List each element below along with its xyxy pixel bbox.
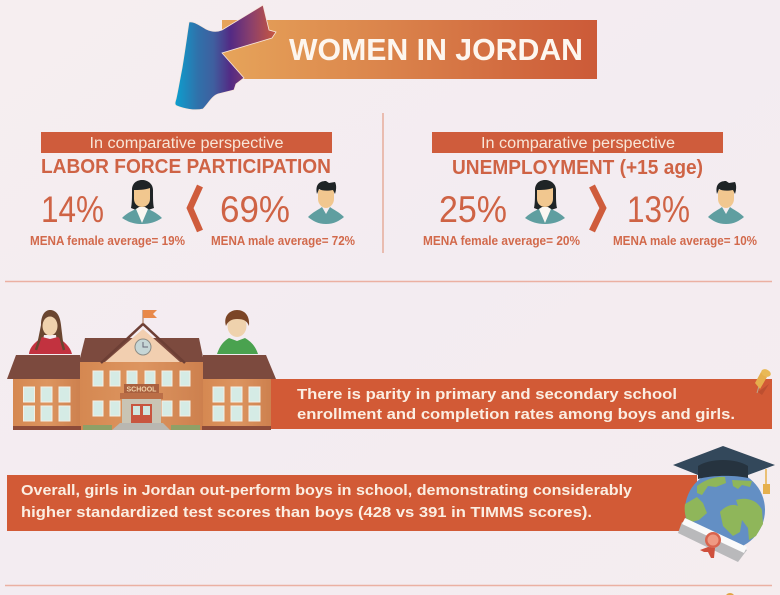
subheading bar xyxy=(432,132,723,153)
icon: woman xyxy=(525,180,565,224)
icon: map of Jordan xyxy=(175,5,276,110)
callout text: There is parity in primary and secondary school xyxy=(297,386,677,403)
heading: LABOR FORCE PARTICIPATION xyxy=(41,156,331,178)
globe xyxy=(685,470,765,550)
callout text: Overall, girls in Jordan out-perform boys in school, demonstrating considerably xyxy=(21,482,633,499)
caption: MENA female average: MENA female average= 19% xyxy=(30,234,185,248)
title: WOMEN IN JORDAN xyxy=(289,32,583,67)
subheading bar: In comparative perspective xyxy=(90,135,284,152)
school sign: SCHOOL xyxy=(127,386,157,394)
comparison arrow: less than xyxy=(190,186,200,231)
stat: female 14%: 14% xyxy=(41,189,104,230)
divider xyxy=(382,113,384,253)
icon: boy xyxy=(217,310,258,354)
panel: labor force participation xyxy=(30,132,355,248)
panel: school parity callout xyxy=(270,368,772,429)
comparison arrow: greater than xyxy=(592,186,603,231)
caption: MENA female average: MENA female average= 20% xyxy=(423,234,580,248)
icon: school with girl and boy xyxy=(7,310,276,430)
school windows xyxy=(24,371,260,421)
subheading bar xyxy=(41,132,332,153)
school roofs xyxy=(7,355,80,379)
callout text: enrollment and completion rates among boys and girls. xyxy=(297,406,735,423)
panel: unemployment xyxy=(423,132,757,248)
caption: MENA male average: MENA male average= 10% xyxy=(613,234,757,248)
callout text: higher standardized test scores than boys (428 vs 391 in TIMMS scores). xyxy=(21,504,592,521)
icon: pin at the bottom edge xyxy=(726,593,734,595)
stat: male 69%: 69% xyxy=(220,189,290,230)
icon: push pin xyxy=(755,368,772,395)
cap tassel xyxy=(763,469,770,494)
icon: man xyxy=(308,181,344,224)
title banner xyxy=(222,20,597,79)
icon: globe with graduation cap and diploma xyxy=(673,446,775,562)
diploma xyxy=(678,518,747,562)
school walls xyxy=(13,378,81,430)
school entrance xyxy=(83,393,200,430)
school sign xyxy=(124,384,159,394)
icon: woman xyxy=(122,180,162,224)
icon: clock xyxy=(135,339,151,355)
icon: flag xyxy=(143,310,157,324)
stat: male 13%: 13% xyxy=(627,189,690,230)
icon: girl xyxy=(29,310,72,354)
cap xyxy=(673,446,775,479)
heading: UNEMPLOYMENT (+15 age) xyxy=(452,157,703,179)
subheading bar: In comparative perspective xyxy=(481,135,675,152)
icon: man xyxy=(708,181,744,224)
caption: MENA male average: MENA male average= 72% xyxy=(211,234,355,248)
panel: test scores callout xyxy=(7,475,697,531)
stat: female 25%: 25% xyxy=(439,189,507,230)
